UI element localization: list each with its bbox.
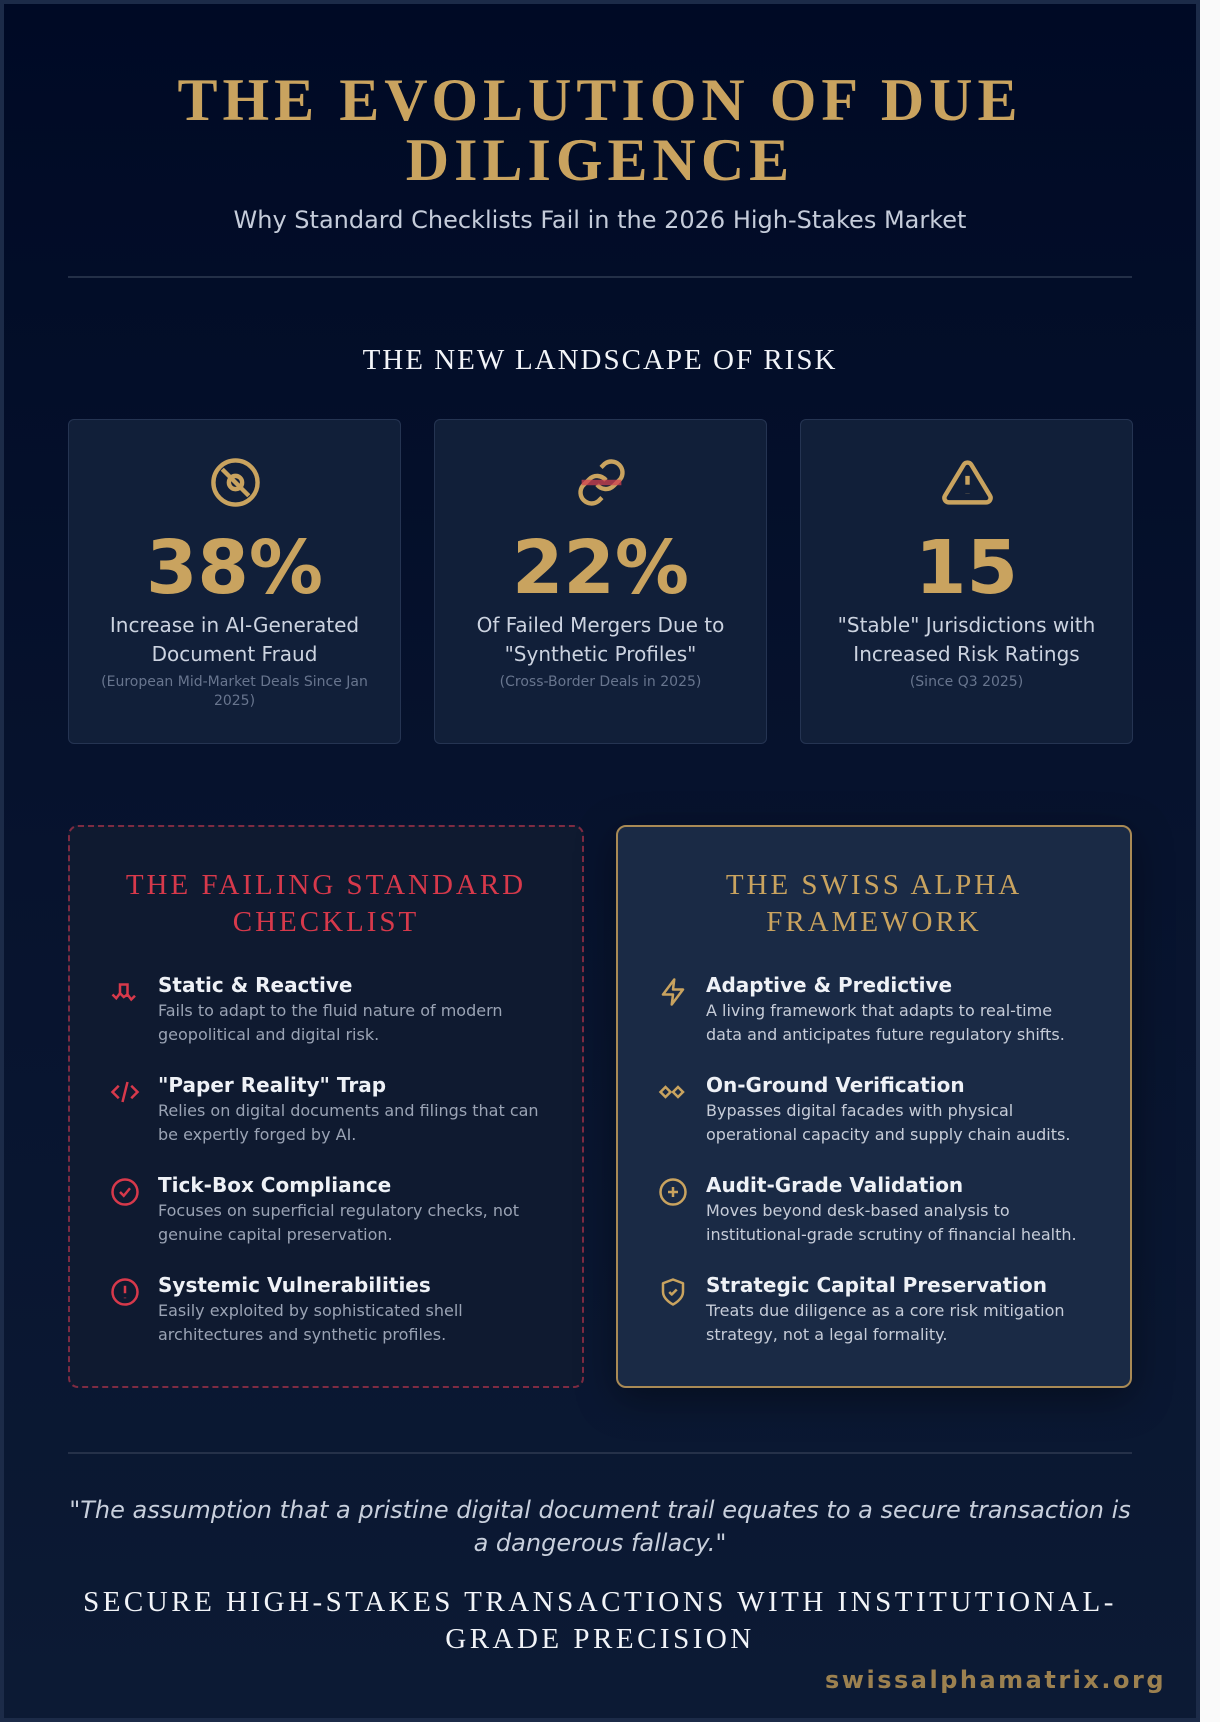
item: adaptive & predictive xyxy=(662,973,1065,1044)
item: audit-grade validation xyxy=(659,1173,1077,1244)
item: strategic capital preservation: Strategic Capital Preservation xyxy=(706,1273,1047,1297)
call to action: SECURE HIGH-STAKES TRANSACTIONS WITH INSTITUTIONAL- xyxy=(83,1586,1117,1618)
subtitle: Why Standard Checklists Fail in the 2026 High-Stakes Market xyxy=(234,206,966,234)
call to action: GRADE PRECISION xyxy=(445,1623,755,1655)
item: systemic vulnerabilities xyxy=(111,1273,463,1344)
item: strategic capital preservation: Treats due diligence as a core risk mitigation strategy, not a legal formality. xyxy=(706,1301,1065,1344)
title: DILIGENCE xyxy=(406,127,794,193)
icon: broken link xyxy=(578,459,625,506)
quote: "The assumption that a pristine digital document trail equates to a secure transaction is a dangerous fallacy." xyxy=(69,1496,1131,1557)
item: paper reality trap: Relies on digital documents and filings that can be expertly forged by AI. xyxy=(158,1101,539,1144)
panel heading xyxy=(126,869,526,938)
stat label: Increase in AI-Generated Document Fraud xyxy=(110,613,359,666)
panel heading: FRAMEWORK xyxy=(766,906,982,938)
stat label: "Stable" Jurisdictions with Increased Risk Ratings xyxy=(838,613,1095,666)
item: strategic capital preservation xyxy=(662,1273,1065,1344)
item: tick-box compliance xyxy=(111,1173,519,1244)
item: adaptive & predictive: Adaptive & Predictive xyxy=(706,973,952,997)
card: 38% xyxy=(68,419,401,744)
stat note: (Cross-Border Deals in 2025) xyxy=(500,674,701,690)
item: systemic vulnerabilities: Systemic Vulnerabilities xyxy=(158,1273,431,1297)
icon: no-eye xyxy=(211,458,260,507)
card: 22% xyxy=(434,419,767,744)
card: 15 xyxy=(800,419,1133,744)
item: audit-grade validation: Audit-Grade Validation xyxy=(706,1173,963,1197)
panel heading: THE FAILING STANDARD xyxy=(126,869,526,901)
item: paper reality trap: "Paper Reality" Trap xyxy=(158,1073,386,1097)
item: systemic vulnerabilities: Easily exploited by sophisticated shell architectures and synthetic profiles. xyxy=(158,1301,463,1344)
call to action xyxy=(83,1586,1117,1655)
stat note: (Since Q3 2025) xyxy=(910,674,1023,690)
item: audit-grade validation: Moves beyond desk-based analysis to institutional-grade scrutiny of financial health. xyxy=(706,1201,1077,1244)
stat number: 15 xyxy=(915,525,1018,611)
item: static & reactive: Fails to adapt to the fluid nature of modern geopolitical and digital risk. xyxy=(158,1001,503,1044)
item: paper reality trap xyxy=(110,1073,539,1144)
section heading: landscape of risk: THE NEW LANDSCAPE OF RISK xyxy=(363,344,837,376)
item: on-ground verification: Bypasses digital facades with physical operational capacity and supply chain audits. xyxy=(706,1101,1070,1144)
item: static & reactive: Static & Reactive xyxy=(158,973,352,997)
item: adaptive & predictive: A living framework that adapts to real-time data and anticipates future regulatory shifts. xyxy=(706,1001,1065,1044)
stat number: 22% xyxy=(512,525,689,611)
item: tick-box compliance: Focuses on superficial regulatory checks, not genuine capital preservation. xyxy=(158,1201,519,1244)
panel heading: THE SWISS ALPHA xyxy=(726,869,1022,901)
item: static & reactive xyxy=(112,973,503,1044)
title xyxy=(177,67,1023,193)
website: swissalphamatrix.org xyxy=(825,1666,1166,1694)
panel heading: CHECKLIST xyxy=(233,906,419,938)
stat number: 38% xyxy=(146,525,323,611)
stat note: (European Mid-Market Deals Since Jan 2025) xyxy=(101,674,368,709)
title: THE EVOLUTION OF DUE xyxy=(177,67,1023,133)
panel: swiss alpha framework xyxy=(616,825,1132,1388)
item: tick-box compliance: Tick-Box Compliance xyxy=(158,1173,391,1197)
icon: warning xyxy=(942,460,993,505)
stat label: Of Failed Mergers Due to "Synthetic Profiles" xyxy=(477,613,724,666)
panel heading xyxy=(726,869,1022,938)
panel: failing standard checklist xyxy=(68,825,584,1388)
item: on-ground verification xyxy=(658,1073,1070,1144)
item: on-ground verification: On-Ground Verification xyxy=(706,1073,965,1097)
